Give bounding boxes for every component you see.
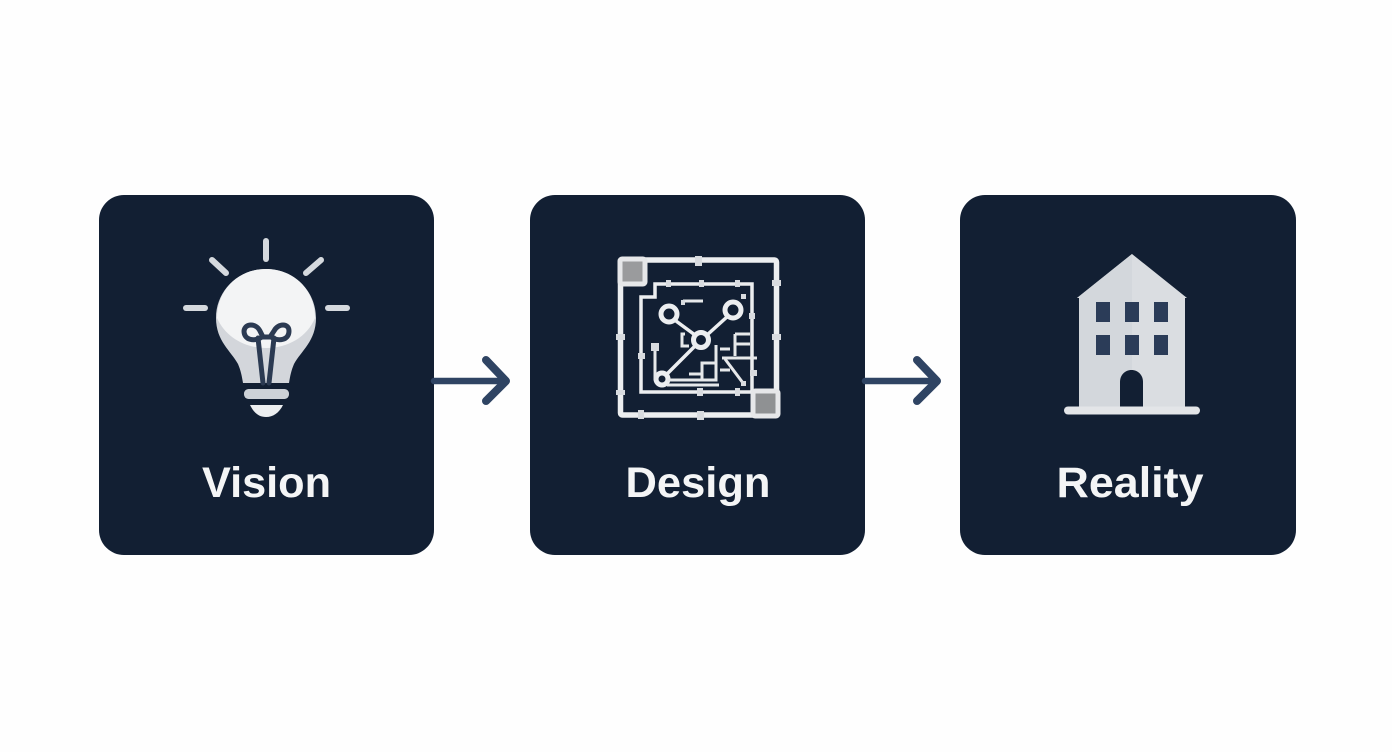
- plan room lines: [655, 301, 757, 385]
- reality card background: [960, 195, 1296, 555]
- building ground line: [1064, 406, 1200, 414]
- building body: [1077, 254, 1187, 407]
- bulb glass: [216, 269, 316, 383]
- icon: floor plan: [616, 256, 781, 420]
- building door: [1120, 370, 1143, 407]
- bulb base tip: [250, 405, 283, 417]
- heading: Reality: Reality: [1056, 459, 1204, 507]
- panel: design: [530, 195, 865, 555]
- heading: Design: Design: [626, 459, 770, 507]
- plan outer wall: [620, 260, 776, 415]
- plan network nodes: [656, 302, 741, 385]
- plan inner wall: [641, 284, 752, 392]
- icon: building: [1064, 254, 1200, 414]
- filament: [244, 325, 289, 383]
- panel: vision: [99, 195, 434, 555]
- design card background: [530, 195, 865, 555]
- arrow: design to reality: [865, 360, 937, 401]
- plan wall ticks: [616, 256, 781, 420]
- building shaded side: [1077, 254, 1132, 407]
- panel: reality: [960, 195, 1296, 555]
- building windows: [1096, 302, 1168, 355]
- bulb highlight: [217, 269, 315, 348]
- plan corner square top left: [620, 259, 645, 284]
- heading: Vision: Vision: [202, 459, 331, 507]
- vision card background: [99, 195, 434, 555]
- bulb rays: [186, 241, 347, 308]
- bulb base bar: [244, 389, 289, 399]
- plan corner square bottom right: [753, 391, 778, 416]
- icon: light bulb: [186, 241, 347, 417]
- arrow: vision to design: [434, 360, 506, 401]
